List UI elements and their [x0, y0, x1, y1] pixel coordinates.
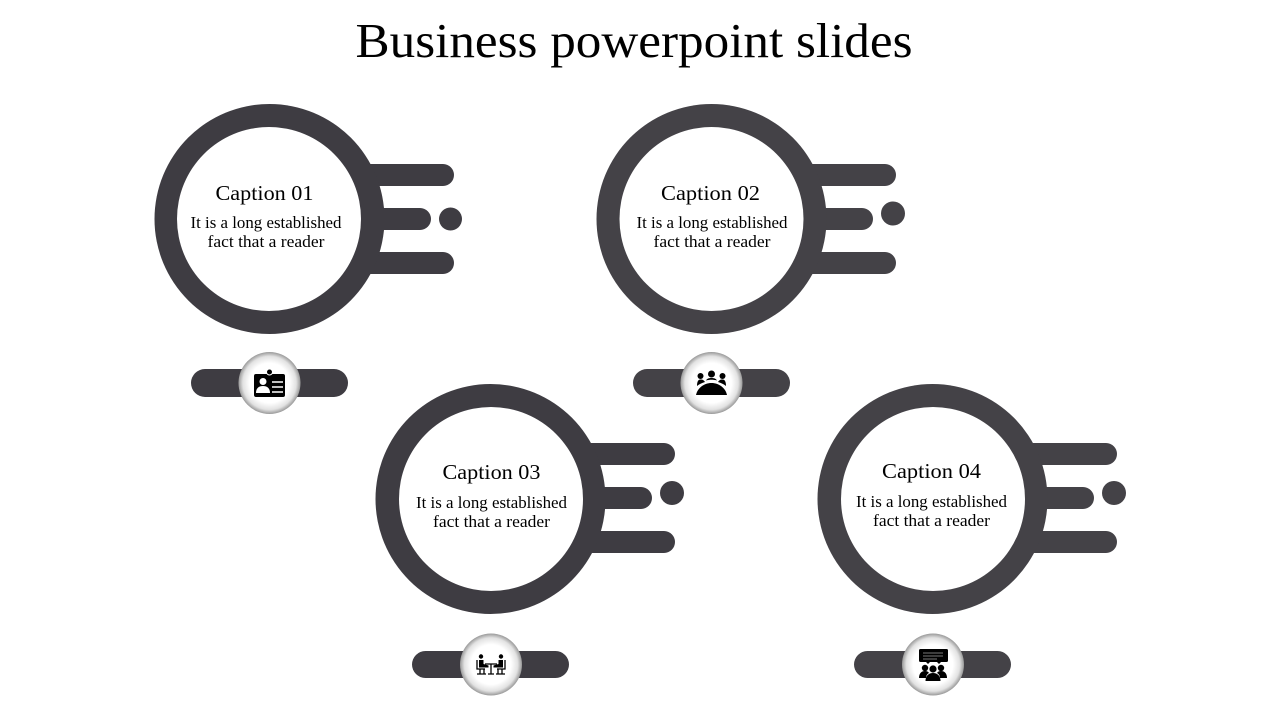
icon: speech board and audience: [919, 649, 948, 681]
panel: caption 04: [818, 384, 1126, 696]
icon badge 03: [460, 634, 522, 696]
icon badge 04: [902, 634, 964, 696]
icon: id card: [254, 369, 285, 397]
icon badge 01: [238, 352, 300, 414]
caption text 02: It is a long established: [636, 213, 788, 232]
ring and bars 03: [376, 384, 684, 614]
ring and bars 01: [154, 104, 462, 334]
caption text 03: It is a long established: [416, 493, 568, 512]
caption text 01: fact that a reader: [208, 232, 325, 251]
icon badge 02: [680, 352, 742, 414]
pill 03: [412, 651, 569, 678]
ring and bars 04: [818, 384, 1126, 614]
caption heading 02: Caption 02: [661, 181, 760, 205]
caption text 04: It is a long established: [856, 492, 1008, 511]
caption text 02: fact that a reader: [654, 232, 771, 251]
pill 04: [854, 651, 1011, 678]
title: Business powerpoint slides: [356, 13, 912, 68]
pill 01: [191, 369, 348, 397]
panel: caption 03: [376, 384, 684, 696]
icon: meeting group: [696, 370, 727, 395]
panel: caption 02: [596, 104, 905, 414]
caption heading 03: Caption 03: [442, 460, 540, 484]
caption heading 04: Caption 04: [882, 459, 982, 483]
icon: two people at table: [477, 654, 505, 674]
panel: caption 01: [154, 104, 462, 414]
caption text 04: fact that a reader: [873, 511, 991, 530]
caption text 01: It is a long established: [190, 213, 342, 232]
ring and bars 02: [596, 104, 905, 334]
pill 02: [633, 369, 790, 397]
caption text 03: fact that a reader: [433, 512, 551, 531]
caption heading 01: Caption 01: [216, 181, 314, 205]
